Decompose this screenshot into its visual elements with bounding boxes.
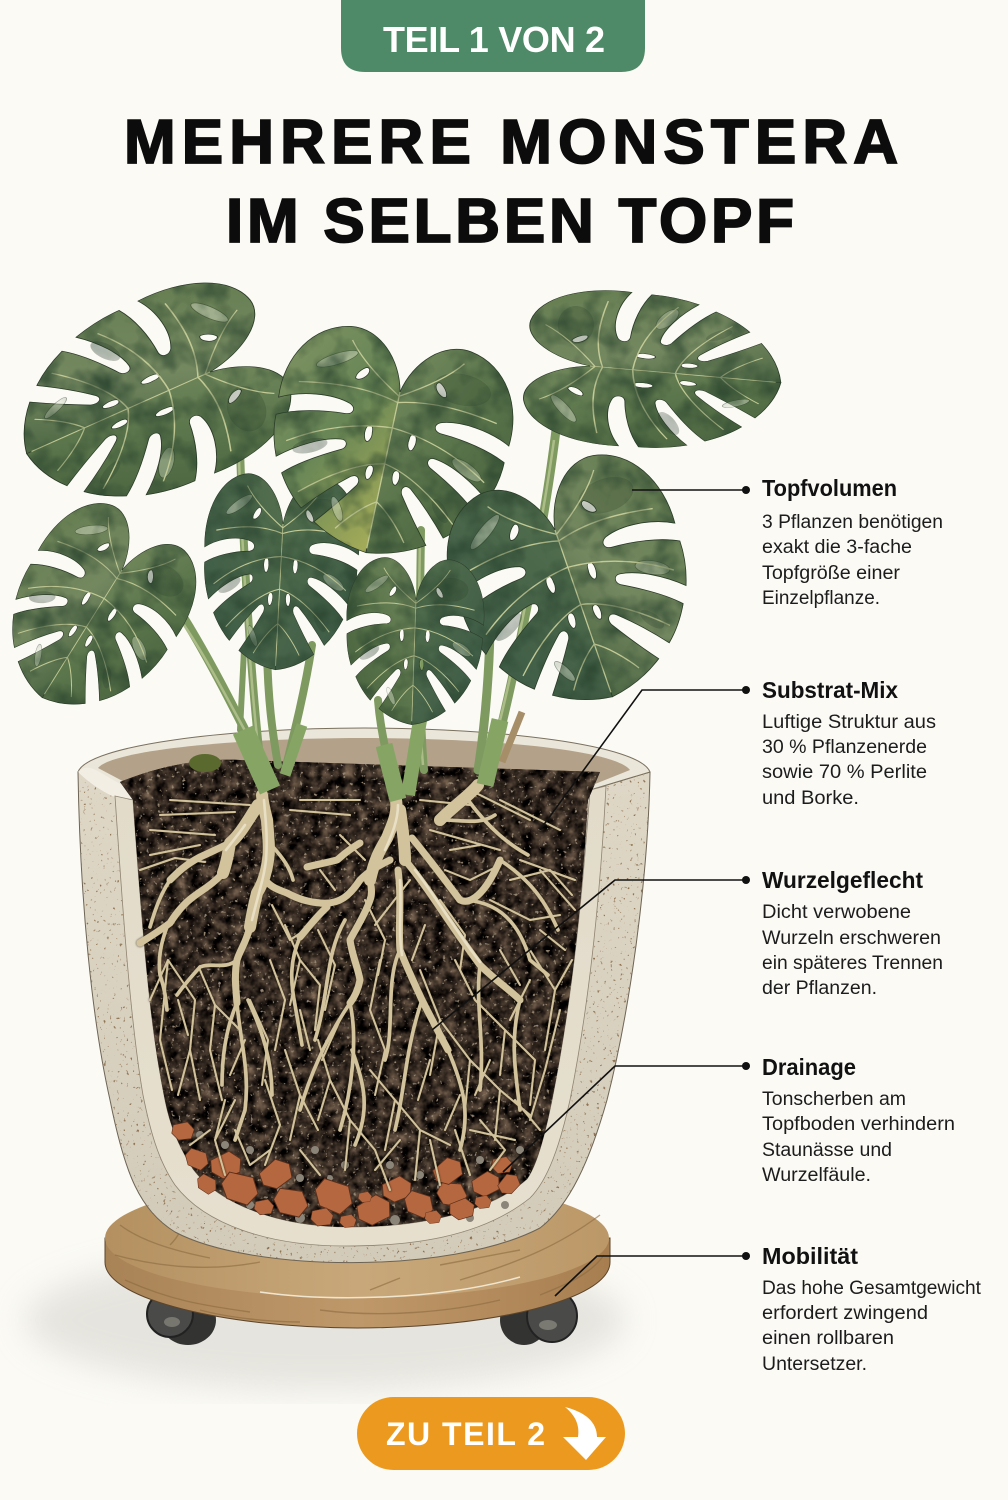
pot: back wall and rim [78, 728, 650, 800]
callout: Topfvolumen [632, 475, 943, 609]
callout: Mobilität: Untersetzer. [762, 1354, 867, 1375]
callout: Drainage: Tonscherben am [762, 1089, 906, 1110]
leaf: middle left [198, 472, 363, 674]
wheel left [147, 1291, 216, 1345]
title: MEHRERE MONSTERA [124, 108, 898, 177]
callout: Topfvolumen: Topfgröße einer [762, 563, 901, 584]
drainage layer: clay shards and gravel [172, 1122, 524, 1229]
callout: Substrat-Mix: 30 % Pflanzenerde [762, 737, 927, 758]
callout: Mobilität: Mobilität [762, 1243, 858, 1269]
callout: Mobilität: einen rollbaren [762, 1328, 894, 1349]
callout: Wurzelgeflecht: der Pflanzen. [762, 978, 877, 999]
callout: Wurzelgeflecht [432, 867, 943, 1030]
title: IM SELBEN TOPF [226, 187, 794, 256]
callout: Wurzelgeflecht: Dicht verwobene [762, 902, 911, 923]
callout: Wurzelgeflecht: Wurzelgeflecht [762, 867, 923, 893]
title [124, 108, 898, 256]
callout: Substrat-Mix: Substrat-Mix [762, 677, 898, 703]
callout: Topfvolumen: Topfvolumen [762, 475, 897, 501]
callout: Drainage: Drainage [762, 1054, 856, 1080]
callout: Wurzelgeflecht: ein späteres Trennen [762, 953, 943, 974]
callout: Mobilität: Das hohe Gesamtgewicht [762, 1278, 982, 1299]
button: zu Teil 2 [357, 1397, 625, 1470]
callout: Topfvolumen: exakt die 3-fache [762, 537, 912, 558]
wooden saucer [105, 1178, 610, 1328]
root network [140, 785, 575, 1190]
leaf: lower centre [343, 556, 486, 727]
plant stems [182, 430, 556, 800]
callout: Wurzelgeflecht: Wurzeln erschweren [762, 928, 941, 949]
leaf: top centre [250, 314, 527, 577]
callout: Drainage: Staunässe und [762, 1140, 892, 1161]
callout: Topfvolumen: Einzelpflanze. [762, 588, 880, 609]
header tab: part label: TEIL 1 VON 2 [383, 19, 605, 60]
wheel right [500, 1290, 577, 1345]
callout: Topfvolumen: 3 Pflanzen benötigen [762, 512, 943, 533]
monstera leaves [0, 259, 788, 741]
callout: Drainage: Wurzelfäule. [762, 1165, 871, 1186]
leaf: far left [0, 484, 218, 741]
leaf: lower right large [426, 437, 722, 734]
ground shadow [25, 1250, 625, 1390]
header tab: part label [341, 0, 645, 72]
callout: Drainage: Topfboden verhindern [762, 1114, 955, 1135]
soil cross-section [110, 750, 610, 1240]
callout: Substrat-Mix: Luftige Struktur aus [762, 712, 936, 733]
callout: Drainage [503, 1054, 955, 1186]
pot: outer wall [70, 760, 660, 1280]
button: zu Teil 2: ZU TEIL 2 [386, 1416, 545, 1452]
callout: Substrat-Mix [540, 677, 936, 830]
leaf: upper right [520, 284, 788, 460]
callout: Substrat-Mix: sowie 70 % Perlite [762, 762, 927, 783]
callout: Mobilität [555, 1243, 982, 1375]
callout: Substrat-Mix: und Borke. [762, 788, 859, 809]
pot: inner cut wall band [115, 786, 606, 1246]
leaf: upper left [0, 259, 309, 540]
callout: Mobilität: erfordert zwingend [762, 1303, 928, 1324]
